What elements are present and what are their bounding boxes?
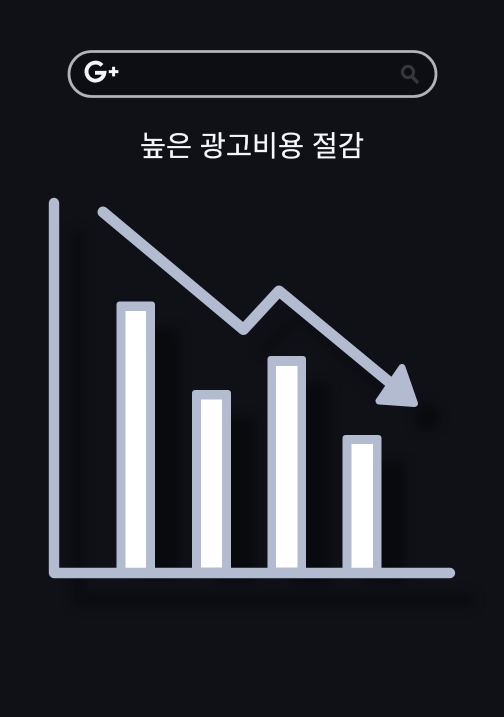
bar 1 [116,302,155,574]
bar 2 [192,390,231,573]
bar chart [116,302,382,574]
arrow head [379,368,414,404]
arrow line [103,212,394,386]
bar 4 [342,435,382,573]
chart shadow [78,230,474,600]
downward trend arrow [103,212,414,404]
title: 높은 광고비용 절감 [140,130,364,162]
chart axes [54,203,450,573]
search bar outline [69,52,436,96]
search bar [69,52,436,96]
icon: Google Plus logo [86,63,118,81]
bar 3 [268,356,306,573]
icon: magnifier [402,66,418,83]
